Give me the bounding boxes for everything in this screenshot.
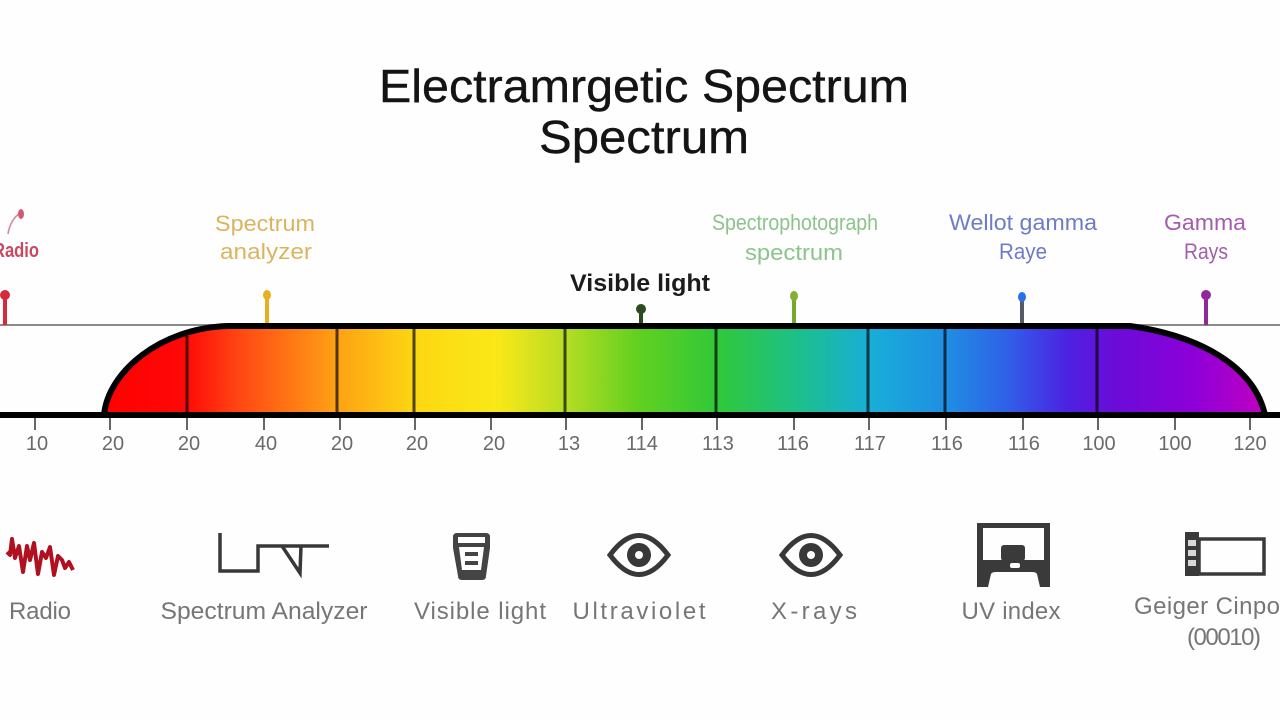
- title: Spectrum: [539, 111, 749, 163]
- caption: geiger counter: (00010): [1187, 624, 1261, 651]
- caption: radio: Radio: [9, 598, 71, 625]
- icon: geiger counter: [1185, 532, 1264, 576]
- axis numbers: [26, 433, 1267, 455]
- pin: visible light: [636, 304, 646, 325]
- axis numbers: 20: [406, 433, 428, 455]
- label: violet gamma rays: [949, 210, 1098, 264]
- pin: green: [790, 291, 798, 325]
- caption: ultraviolet: Ultraviolet: [572, 598, 706, 625]
- pin: radio: [0, 290, 10, 325]
- label: spectrum analyzer: analyzer: [220, 239, 312, 264]
- band dividers: [187, 328, 1097, 414]
- spectrum bar: [104, 326, 1265, 415]
- caption: spectrum analyzer: Spectrum Analyzer: [160, 598, 368, 625]
- label: visible light: Visible light: [570, 270, 710, 297]
- title: [379, 60, 909, 163]
- axis numbers: 40: [255, 433, 277, 455]
- label: spectrophotograph: [712, 210, 878, 265]
- bottom axis: [0, 412, 1280, 418]
- top baseline: [0, 324, 1280, 326]
- axis numbers: 20: [102, 433, 124, 455]
- axis numbers: 120: [1233, 433, 1267, 455]
- axis numbers: 100: [1158, 433, 1192, 455]
- label: gamma rays: Rays: [1184, 239, 1228, 264]
- axis numbers: 117: [854, 433, 886, 455]
- icon: radio wave: [7, 539, 73, 575]
- axis numbers: 13: [558, 433, 580, 455]
- axis numbers: 10: [26, 433, 48, 455]
- marker pins: [0, 290, 1211, 325]
- label: spectrophotograph: Spectrophotograph: [712, 210, 878, 235]
- axis ticks: [35, 418, 1250, 430]
- pin: purple: [1201, 290, 1211, 325]
- caption: uv index: UV index: [962, 598, 1060, 625]
- axis numbers: 116: [777, 433, 809, 455]
- label: gamma rays: [1164, 210, 1247, 264]
- label: radio: [0, 209, 39, 262]
- label: violet gamma rays: Raye: [999, 239, 1047, 264]
- title: Electramrgetic Spectrum: [379, 60, 909, 112]
- axis numbers: 114: [626, 433, 658, 455]
- pin: spectrum analyzer: [263, 290, 271, 325]
- caption: geiger counter: Geiger Cinpo: [1134, 593, 1280, 620]
- axis numbers: 20: [178, 433, 200, 455]
- icon: x-ray eye: [782, 536, 840, 574]
- icon captions: [9, 593, 1280, 651]
- label: spectrum analyzer: Spectrum: [215, 211, 315, 236]
- axis numbers: 100: [1082, 433, 1116, 455]
- axis numbers: 116: [931, 433, 963, 455]
- icon: eye: [610, 536, 668, 574]
- caption: x-rays: X-rays: [771, 598, 857, 625]
- icon: cup: [453, 533, 490, 580]
- label: spectrum analyzer: [215, 211, 315, 264]
- icon: uv index: [977, 523, 1050, 587]
- axis numbers: 20: [331, 433, 353, 455]
- caption: geiger counter: [1134, 593, 1280, 651]
- pin: blue: [1018, 292, 1026, 325]
- label: spectrophotograph: spectrum: [745, 240, 843, 265]
- axis numbers: 113: [702, 433, 734, 455]
- axis numbers: 20: [483, 433, 505, 455]
- label: violet gamma rays: Wellot gamma: [949, 210, 1098, 235]
- label: gamma rays: Gamma: [1164, 210, 1247, 235]
- axis numbers: 116: [1008, 433, 1040, 455]
- caption: visible light: Visible light: [414, 598, 546, 625]
- icon: spectrum analyzer: [220, 533, 329, 573]
